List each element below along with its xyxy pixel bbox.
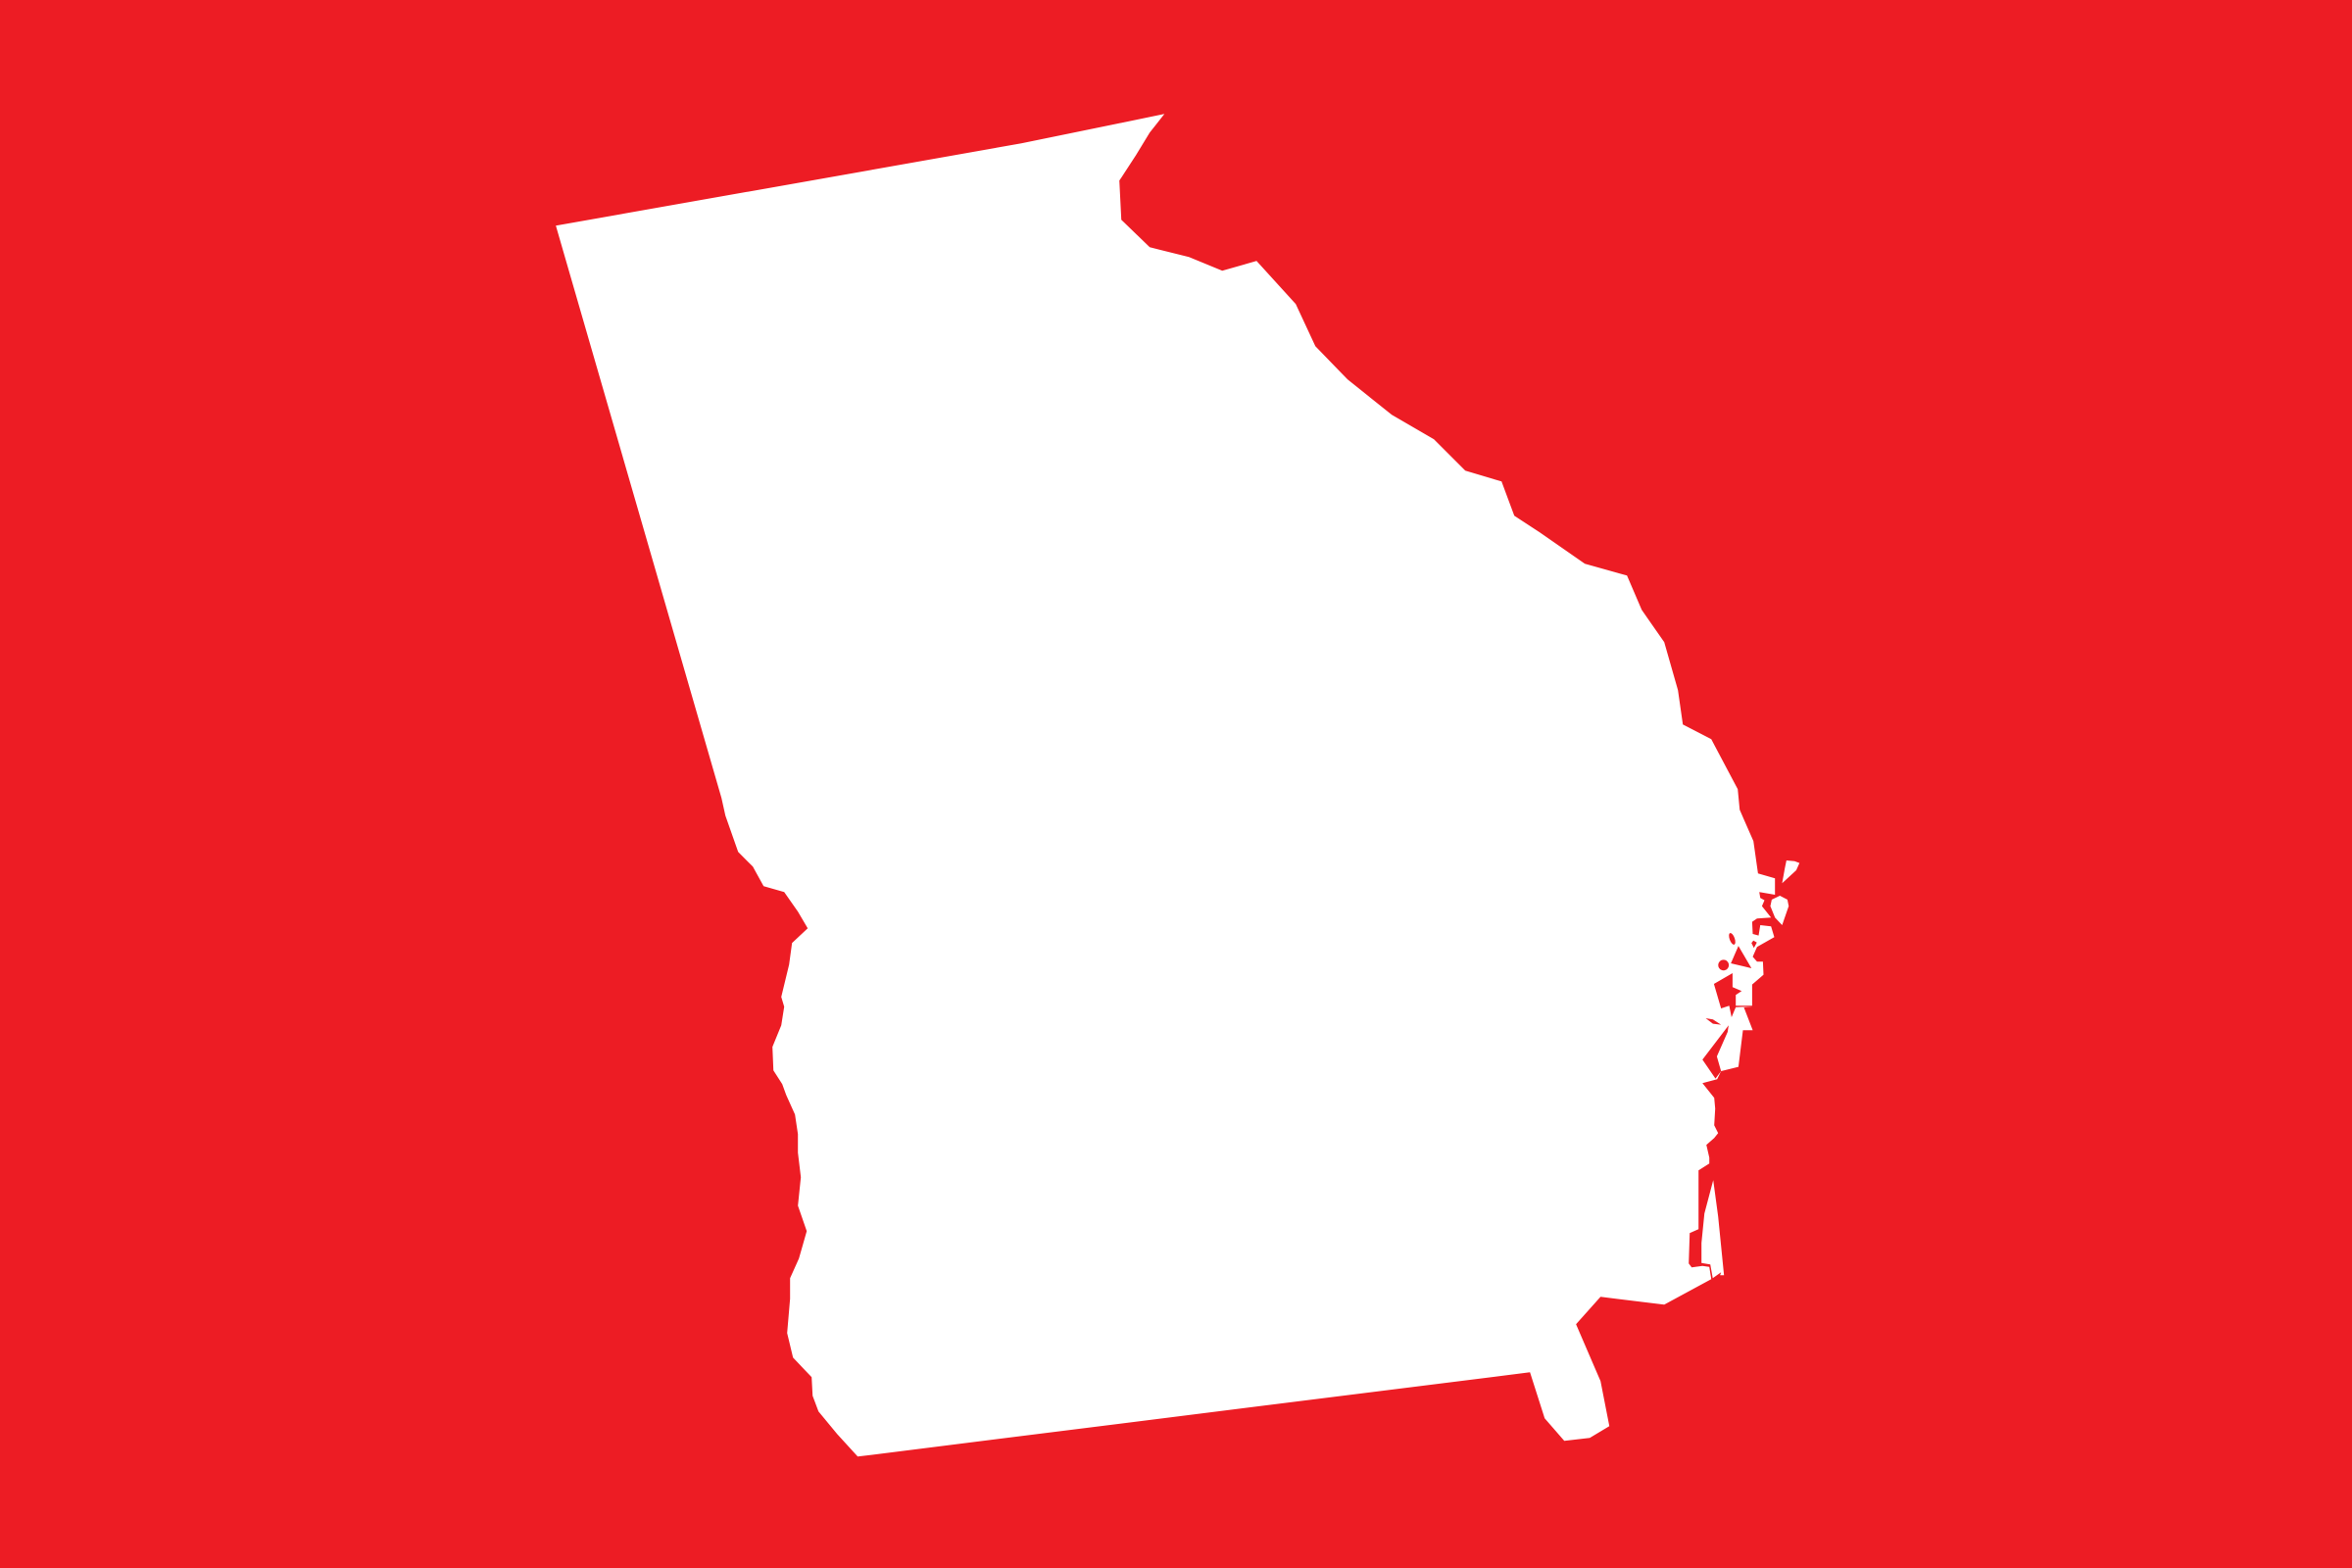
barrier island: long southern island bbox=[1701, 1180, 1724, 1278]
inlet: channel left of lower island bbox=[1702, 1025, 1729, 1079]
inlet: round blob bbox=[1718, 959, 1729, 970]
barrier island: north teardrop bbox=[1782, 860, 1799, 883]
map: Georgia state silhouette bbox=[556, 114, 1799, 1456]
mainland outline bbox=[556, 114, 1775, 1456]
inlet: triangle bbox=[1731, 946, 1751, 968]
coastal inlets and marsh channels bbox=[1702, 932, 1757, 1079]
inlet: sliver bbox=[1705, 1018, 1721, 1025]
barrier island: second teardrop bbox=[1770, 896, 1788, 925]
inlet: angular sound bbox=[1714, 973, 1752, 1017]
inlet: small drop bbox=[1751, 941, 1757, 948]
inlet: small oval bbox=[1728, 932, 1737, 946]
